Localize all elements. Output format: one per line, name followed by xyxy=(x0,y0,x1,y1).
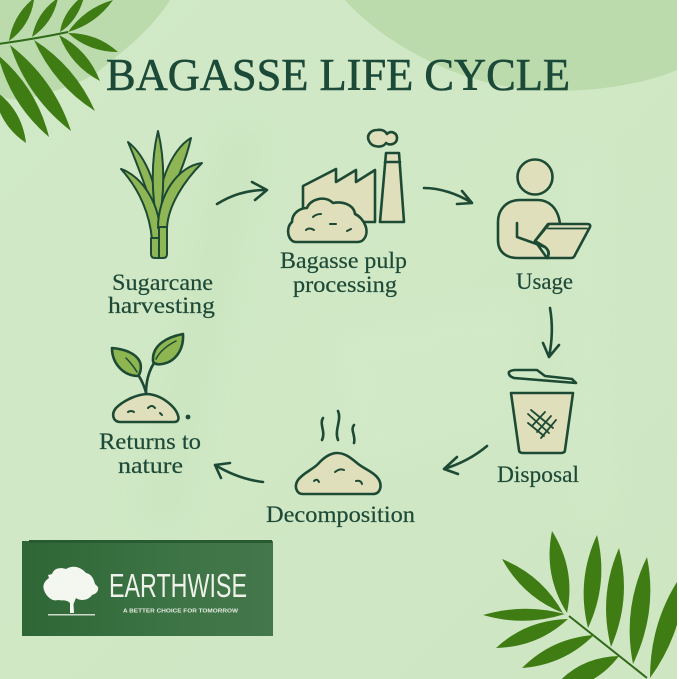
label: Bagasse pulp processing xyxy=(280,248,407,297)
icon: white tree xyxy=(43,567,98,616)
step: bagasse pulp processing xyxy=(280,130,407,297)
label: Returns to nature: nature xyxy=(118,453,183,478)
label: Sugarcane harvesting xyxy=(108,270,216,318)
arrow: usage to disposal xyxy=(543,308,559,357)
palm frond: bottom right xyxy=(483,531,679,679)
arrow: harvesting to processing xyxy=(217,182,267,204)
background blob: top right xyxy=(345,0,677,91)
logo panel: Earthwise xyxy=(22,540,273,636)
label: Decomposition: Decomposition xyxy=(266,502,416,527)
label: Sugarcane harvesting: Sugarcane xyxy=(112,270,213,295)
label: Sugarcane harvesting: harvesting xyxy=(108,293,216,318)
icon: factory with pulp pile xyxy=(288,130,404,242)
step: returns to nature xyxy=(99,334,201,478)
icon: seedling in soil xyxy=(112,334,183,422)
step: usage xyxy=(498,160,590,294)
step: disposal xyxy=(497,370,579,487)
label: Bagasse pulp processing: processing xyxy=(293,272,398,297)
step: sugarcane harvesting xyxy=(108,131,216,318)
tagline: A BETTER CHOICE FOR TOMORROW xyxy=(123,608,239,614)
arrow: decomposition to returns xyxy=(215,463,263,482)
icon: decomposing mound xyxy=(296,453,380,494)
label: Usage: Usage xyxy=(516,269,573,294)
background blob: top left xyxy=(0,0,170,100)
icon: sugarcane xyxy=(121,131,202,258)
icon: steam xyxy=(322,411,354,443)
palm frond: top left xyxy=(0,0,118,143)
title: BAGASSE LIFE CYCLE xyxy=(106,50,570,100)
label: Returns to nature xyxy=(100,433,200,474)
icon: waste bin xyxy=(509,370,576,453)
label: Disposal: Disposal xyxy=(497,462,579,487)
icon: dot xyxy=(186,415,190,419)
label: Bagasse pulp processing: Bagasse pulp xyxy=(280,248,407,273)
arrow: disposal to decomposition xyxy=(444,446,487,474)
soft background shadows xyxy=(140,130,610,520)
arrow: processing to usage xyxy=(424,188,472,204)
icon: person with tablet xyxy=(498,160,590,258)
brand name: EARTHWISE xyxy=(109,567,247,604)
step: decomposition xyxy=(266,411,416,527)
label: Returns to nature: Returns to xyxy=(99,429,201,454)
